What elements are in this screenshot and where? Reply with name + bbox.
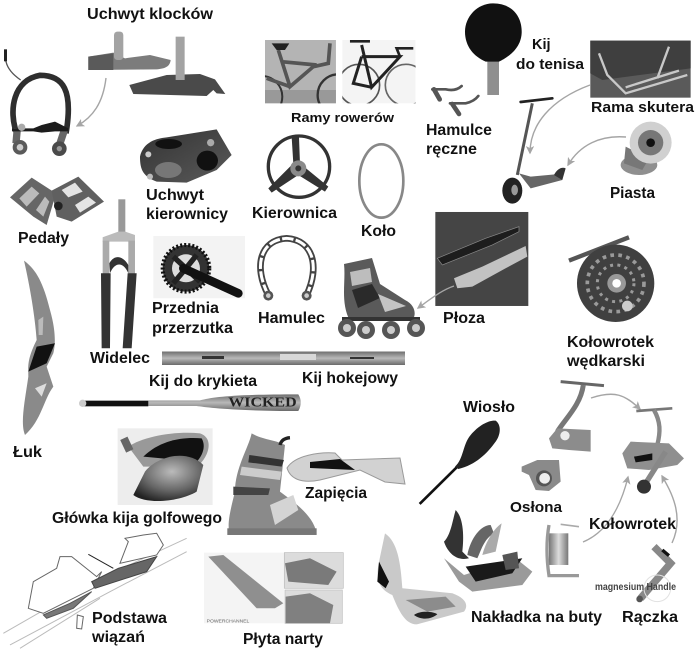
icon: ski boot bbox=[227, 433, 317, 535]
icon: horseshoe brake bbox=[260, 238, 313, 301]
icon: pedals bbox=[10, 177, 104, 225]
label: Rączka: Rączka bbox=[622, 609, 678, 626]
arrow: frame to reel bbox=[591, 394, 640, 409]
icon: suspension fork bbox=[101, 199, 137, 348]
icon: kayak paddle bbox=[420, 421, 500, 504]
label: Główka kija golfowego: Główka kija golfowego bbox=[52, 510, 222, 527]
label: Nakładka na buty: Nakładka na buty bbox=[471, 609, 602, 626]
icon: hand brakes bbox=[432, 86, 478, 114]
icon: reel cover bbox=[522, 460, 561, 491]
icon: brake pad holder 1 bbox=[88, 32, 171, 70]
label: Wiosło: Wiosło bbox=[463, 399, 515, 416]
label: Kij do tenisa: do tenisa bbox=[516, 57, 585, 73]
icon: wheel rim bbox=[359, 144, 403, 218]
icon: hub bbox=[621, 122, 672, 175]
label: Ramy rowerów: Ramy rowerów bbox=[291, 110, 395, 125]
icon: spinning reel assembled bbox=[622, 408, 684, 494]
label: Przednia przerzutka: Przednia bbox=[152, 300, 219, 317]
label: Kołowrotek wędkarski: Kołowrotek bbox=[567, 334, 654, 351]
label: Kij do krykieta: Kij do krykieta bbox=[149, 373, 257, 390]
icon: ski plate photo bbox=[204, 553, 343, 623]
small caption: magnesium Handle: magnesium Handle bbox=[595, 581, 676, 593]
icon: V-brake bbox=[4, 49, 68, 156]
arrow: handle to reel bbox=[662, 476, 677, 543]
icon: hockey stick bbox=[162, 352, 405, 365]
label: Kierownica: Kierownica bbox=[252, 205, 337, 222]
icon: boot plate binding bbox=[377, 533, 466, 624]
label: Pedały: Pedały bbox=[18, 230, 69, 247]
icon: steering wheel bbox=[268, 136, 330, 197]
label: Łuk: Łuk bbox=[13, 444, 42, 461]
label: Uchwyt klocków: Uchwyt klocków bbox=[87, 6, 214, 23]
arrow: frame to scooter bbox=[530, 85, 590, 153]
label: Kij do tenisa: Kij bbox=[532, 37, 551, 53]
label: Koło: Koło bbox=[361, 223, 396, 240]
label: Kij hokejowy: Kij hokejowy bbox=[302, 370, 398, 387]
label: Kołowrotek wędkarski: wędkarski bbox=[566, 353, 645, 370]
label: Piasta: Piasta bbox=[610, 185, 655, 202]
icon: electric scooter bbox=[502, 98, 566, 204]
icon: cricket bat bbox=[79, 394, 301, 411]
icon: skate chassis photo bbox=[435, 212, 528, 306]
icon: handlebar stem bbox=[140, 129, 232, 183]
label: Hamulec: Hamulec bbox=[258, 310, 325, 327]
label: Widelec: Widelec bbox=[90, 350, 150, 367]
label: Podstawa wiązań: Podstawa bbox=[92, 610, 167, 627]
icon: crankset bbox=[153, 236, 245, 298]
label: Uchwyt kierownicy: kierownicy bbox=[146, 206, 228, 223]
icon: reel handle bbox=[636, 547, 671, 602]
label: Hamulce ręczne: ręczne bbox=[426, 141, 477, 158]
icon: bicycle frame photo 1 bbox=[264, 40, 336, 104]
icon: reel frame part bbox=[549, 382, 604, 452]
arrow: chassis to skate bbox=[418, 286, 454, 308]
label: Płoza: Płoza bbox=[443, 310, 485, 327]
label: Osłona: Osłona bbox=[510, 499, 563, 516]
label: Uchwyt kierownicy: Uchwyt bbox=[146, 187, 204, 204]
arrow: pad to brake bbox=[77, 78, 106, 126]
icon: reel rotor cup bbox=[547, 524, 579, 576]
icon: table tennis paddle bbox=[465, 3, 522, 95]
icon: ski plate photo: POWERCHANNEL bbox=[207, 618, 250, 623]
icon: snowboard binding bbox=[444, 510, 532, 592]
icon: golf club head bbox=[118, 428, 213, 505]
label: Kołowrotek: Kołowrotek bbox=[589, 516, 676, 533]
icon: inline skate bbox=[338, 258, 425, 339]
icon: ski boot buckles bbox=[287, 453, 405, 484]
icon: bow riser bbox=[23, 261, 55, 435]
label: Przednia przerzutka: przerzutka bbox=[152, 320, 233, 337]
icon: cricket bat: WICKED bbox=[228, 395, 297, 410]
arrow: hub to scooter bbox=[568, 137, 626, 165]
icon: scooter frame photo bbox=[590, 41, 691, 98]
label: Rama skutera: Rama skutera bbox=[591, 100, 695, 116]
label: Podstawa wiązań: wiązań bbox=[91, 629, 145, 646]
label: Hamulce ręczne: Hamulce bbox=[426, 122, 492, 139]
label: Zapięcia: Zapięcia bbox=[305, 485, 367, 502]
label: Płyta narty: Płyta narty bbox=[243, 631, 323, 648]
icon: brake pad holder 2 bbox=[129, 37, 225, 96]
icon: bicycle frame photo 2 bbox=[342, 40, 416, 104]
icon: fly fishing reel bbox=[569, 237, 654, 322]
icon: binding base drawing bbox=[3, 533, 187, 648]
arrow: cup to reel bbox=[583, 477, 628, 542]
